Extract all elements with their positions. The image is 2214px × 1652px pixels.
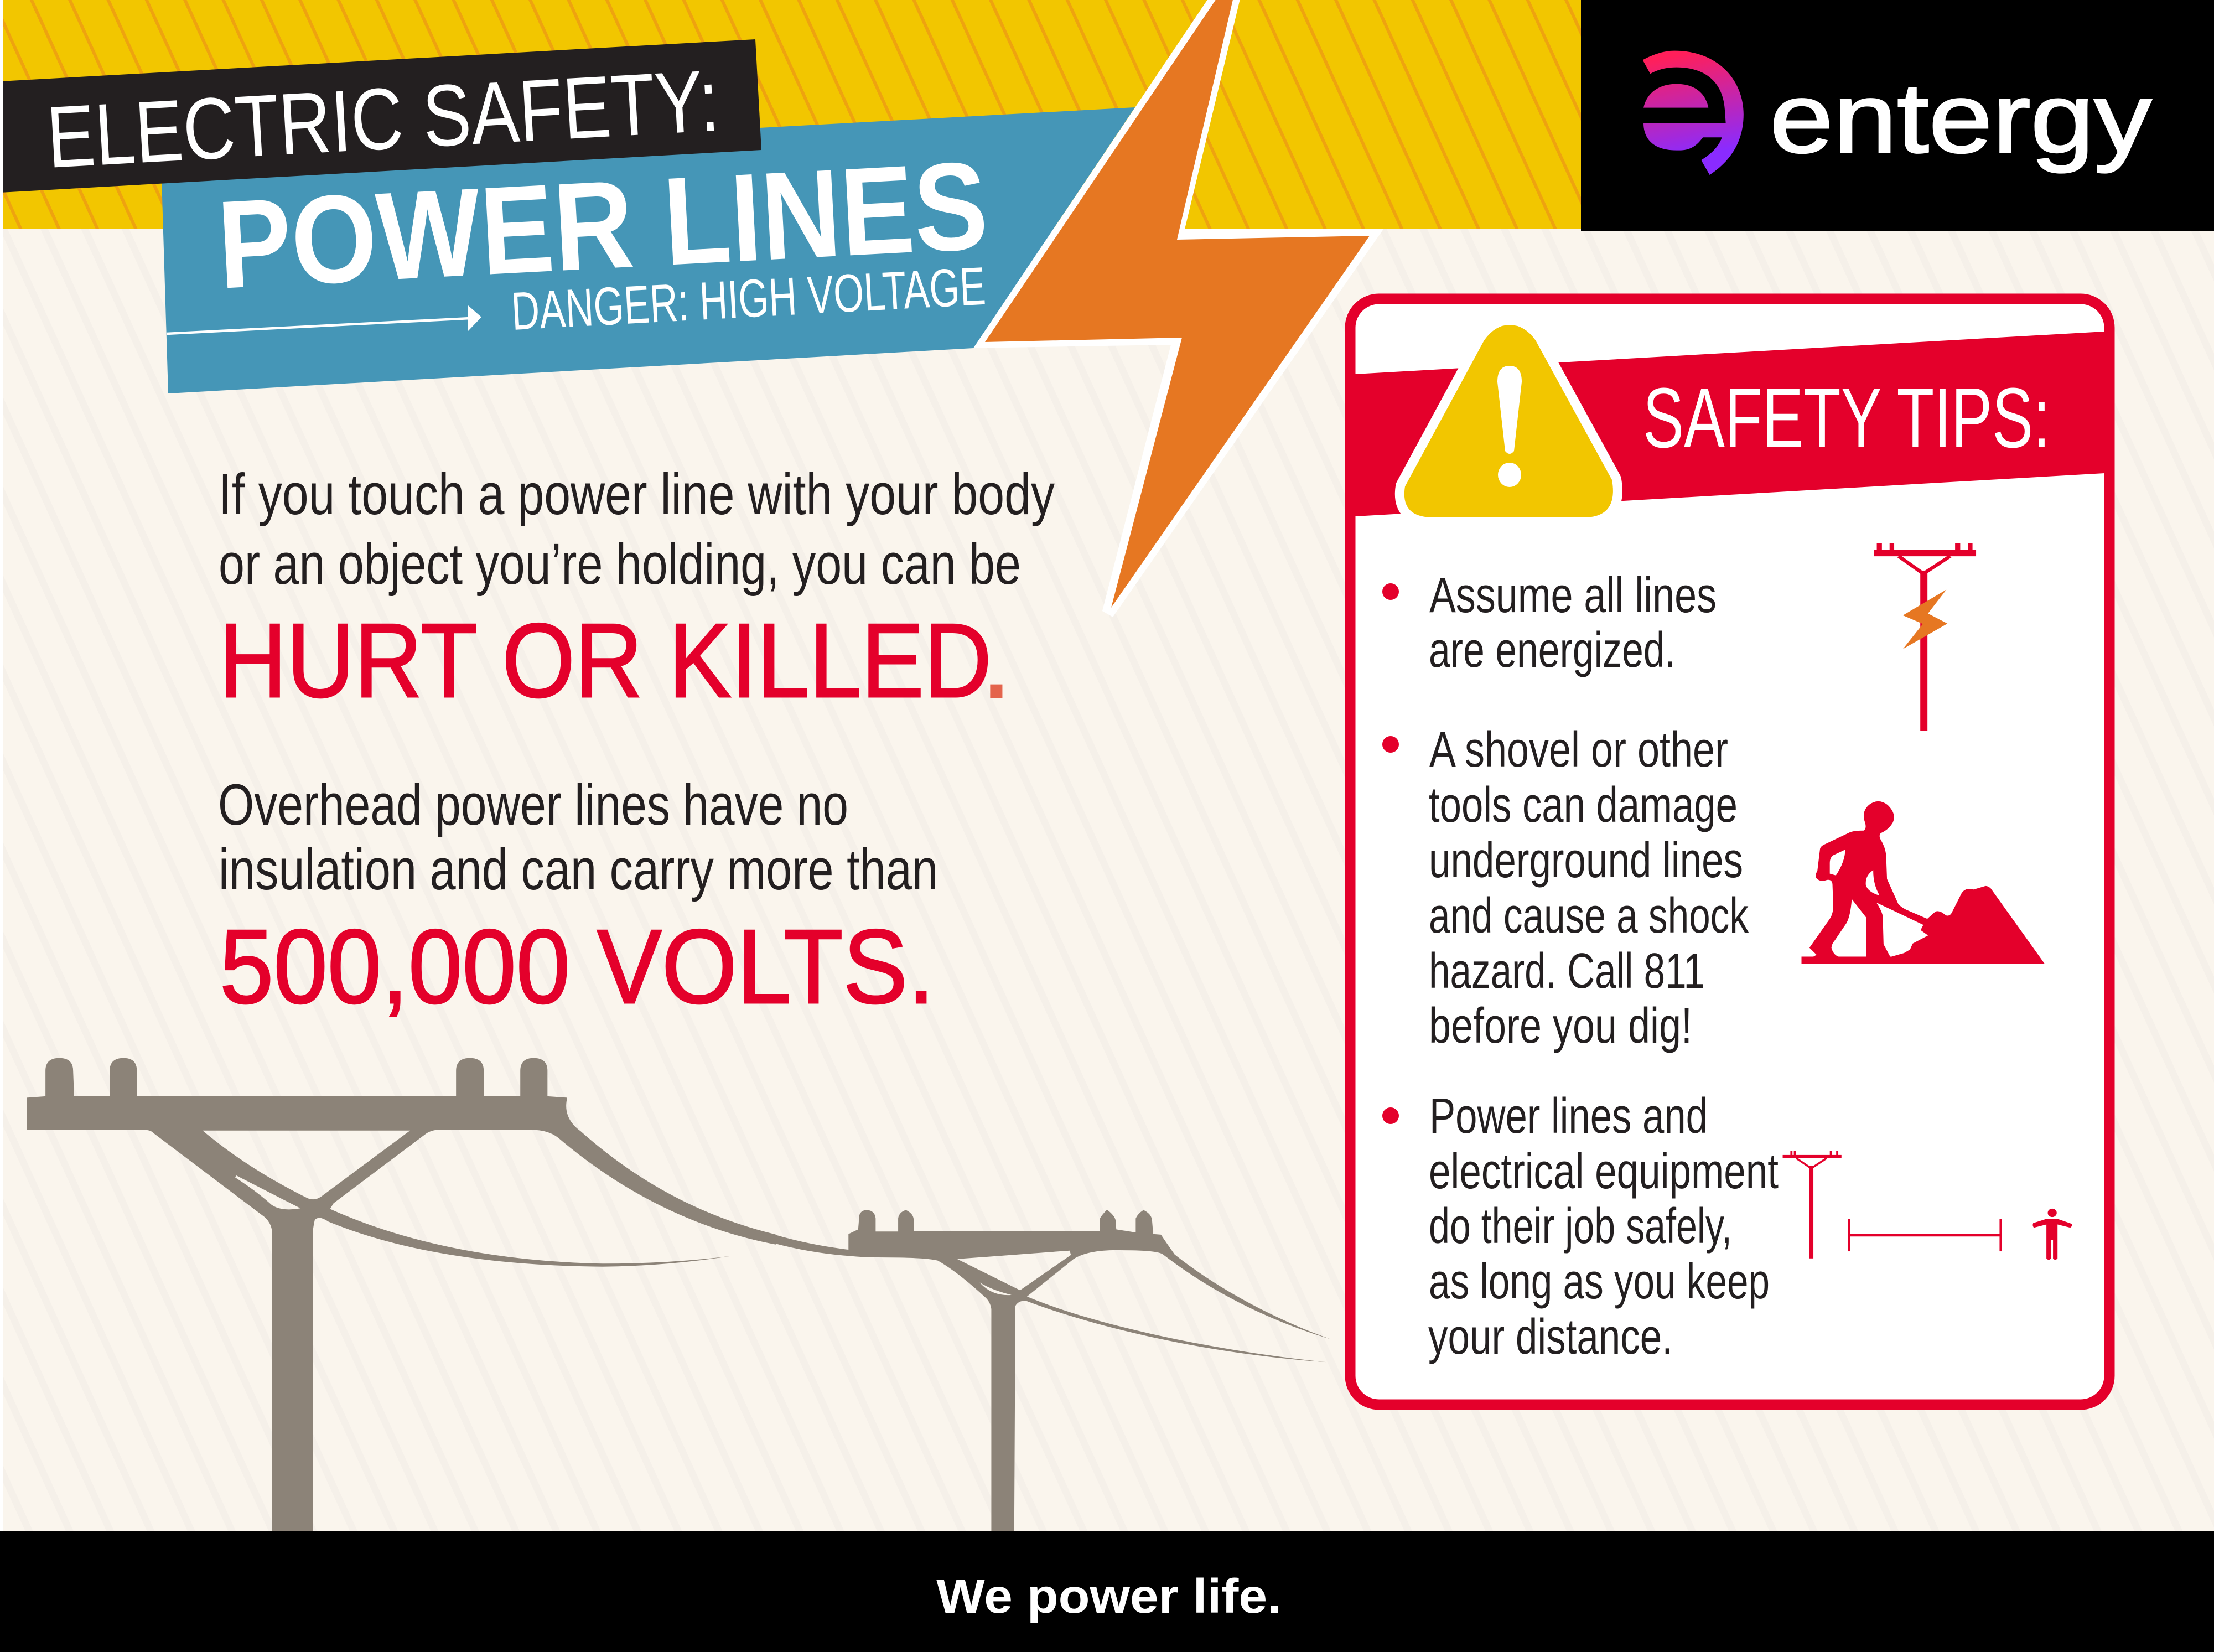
logo wordmark: entergy <box>1770 63 2152 173</box>
bullet tip three: your distance. <box>1428 1309 1673 1365</box>
bullet tip two: and cause a shock <box>1429 888 1749 944</box>
text block: touch warning: If you touch a power line with your body <box>219 462 1055 527</box>
bullet tip one: Assume all lines <box>1429 568 1717 623</box>
text block: overhead lines <box>218 773 938 902</box>
icon: warning triangle <box>1404 325 1613 517</box>
heading: electric safety: ELECTRIC SAFETY: <box>44 52 722 187</box>
heading band <box>1355 332 2104 516</box>
bullet tip one: are energized. <box>1429 623 1676 678</box>
callout: hurt or killed: . <box>982 602 1011 719</box>
bullet tip three: do their job safely, <box>1429 1199 1732 1254</box>
bullet tip two: tools can damage <box>1429 778 1738 833</box>
bullet tip three <box>1382 1089 1779 1365</box>
bullet tip two <box>1382 722 1749 1054</box>
panel: footer <box>0 1531 2214 1652</box>
footer tagline: We power life. <box>936 1570 1282 1623</box>
icon: entergy logo mark <box>1643 51 1744 175</box>
bullet tip two: hazard. Call 811 <box>1429 944 1705 999</box>
icon: person digging <box>1802 801 2045 964</box>
subheading: danger high voltage: DANGER: HIGH VOLTAGE <box>510 256 987 341</box>
callout: hurt or killed: HURT OR KILLED <box>219 602 992 719</box>
panel: safety tips card <box>1350 299 2109 1405</box>
illustration: large power pole <box>27 1058 776 1532</box>
icon: keep distance diagram <box>1783 1151 2072 1260</box>
heading: power lines: POWER LINES <box>214 134 991 315</box>
arrow: title arrow <box>167 305 481 334</box>
text block: touch warning <box>219 462 1055 597</box>
bullet tip two: before you dig! <box>1429 998 1692 1054</box>
illustration: small power pole <box>775 1210 1331 1531</box>
panel: black title banner <box>0 39 761 193</box>
bullet tip three: Power lines and <box>1429 1089 1708 1144</box>
bullet tip three: electrical equipment <box>1429 1144 1779 1199</box>
text block: overhead lines: insulation and can carry more than <box>219 837 938 902</box>
panel: blue title banner <box>161 107 1135 393</box>
heading: safety tips: SAFETY TIPS: <box>1643 370 2050 465</box>
panel: logo block <box>1581 0 2214 231</box>
callout: 500,000 volts: 500,000 VOLTS. <box>220 908 935 1026</box>
bullet tip three: as long as you keep <box>1429 1254 1770 1309</box>
text block: touch warning: or an object you’re holding, you can be <box>219 532 1021 597</box>
bullet tip one <box>1382 568 1717 678</box>
icon: pole with bolt <box>1874 543 1976 731</box>
yellow striped header band <box>0 0 1583 229</box>
bullet tip two: underground lines <box>1429 833 1743 888</box>
icon: lightning bolt <box>973 0 1383 617</box>
bullet tip two: A shovel or other <box>1429 722 1728 778</box>
text block: overhead lines: Overhead power lines have no <box>218 773 848 837</box>
